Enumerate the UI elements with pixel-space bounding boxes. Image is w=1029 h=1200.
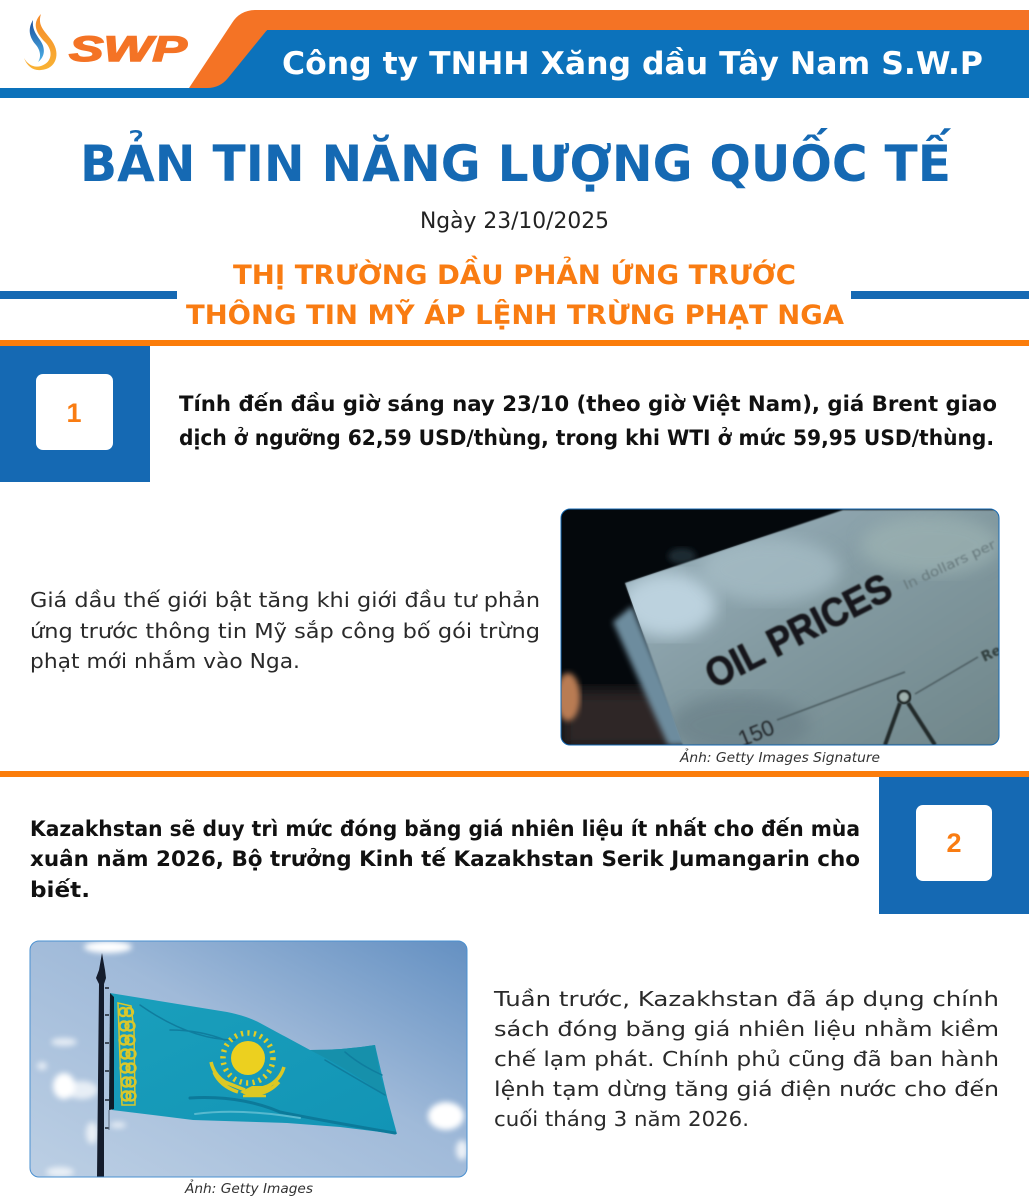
text: section 1 lead: Tính đến đầu giờ sáng nay 23/10 (theo giờ Việt Nam), giá Brent giao bbox=[179, 392, 997, 416]
text: section 2 lead bbox=[30, 817, 860, 902]
panel: section 1 number: 1 bbox=[66, 398, 82, 428]
text: section 2 body: chế lạm phát. Chính phủ cũng đã ban hành bbox=[494, 1047, 999, 1071]
text: section 2 body: Tuần trước, Kazakhstan đã áp dụng chính bbox=[493, 987, 999, 1011]
flag pole bbox=[96, 953, 109, 1177]
blue ribbon and bottom bar bbox=[0, 30, 1029, 98]
logo: SWP flame: SWP bbox=[69, 30, 188, 69]
text: section 1 body: ứng trước thông tin Mỹ sắp công bố gói trừng bbox=[30, 619, 540, 643]
text: section 2 lead: xuân năm 2026, Bộ trưởng Kinh tế Kazakhstan Serik Jumangarin cho bbox=[30, 847, 860, 871]
text: section 2 body: cuối tháng 3 năm 2026. bbox=[494, 1107, 749, 1131]
photo: Kazakhstan flag bbox=[30, 941, 468, 1177]
text: section 1 lead bbox=[179, 392, 997, 450]
header banner bbox=[0, 10, 1029, 98]
text: section 2 lead: Kazakhstan sẽ duy trì mức đóng băng giá nhiên liệu ít nhất cho đến mùa bbox=[30, 817, 860, 841]
flag ornament bbox=[118, 1003, 136, 1105]
flag sun and eagle bbox=[211, 1033, 284, 1096]
company name: Công ty TNHH Xăng dầu Tây Nam S.W.P bbox=[282, 46, 983, 82]
subtitle bbox=[0, 256, 1029, 331]
photo: oil prices: OIL PRICES bbox=[698, 566, 899, 697]
text: section 1 body: phạt mới nhắm vào Nga. bbox=[30, 649, 300, 673]
text: section 2 body: lệnh tạm dừng tăng giá điện nước cho đến bbox=[494, 1077, 999, 1101]
photo: oil prices: Re bbox=[979, 643, 1004, 666]
text: section 1 body bbox=[30, 588, 540, 673]
subtitle: THÔNG TIN MỸ ÁP LỆNH TRỪNG PHẠT NGA bbox=[186, 299, 844, 331]
flag cloth bbox=[109, 993, 397, 1134]
photo: oil prices bbox=[556, 509, 1004, 755]
panel: section 2 number bbox=[879, 777, 1029, 914]
subtitle: THỊ TRƯỜNG DẦU PHẢN ỨNG TRƯỚC bbox=[233, 256, 796, 291]
text: section 2 lead: biết. bbox=[30, 878, 90, 902]
text: section 2 body bbox=[493, 987, 999, 1131]
photo: oil prices: 150 bbox=[735, 715, 778, 752]
date: Ngày 23/10/2025 bbox=[420, 209, 609, 234]
panel: section 1 number bbox=[0, 346, 150, 482]
panel: section 2 number: 2 bbox=[946, 828, 962, 858]
logo: SWP flame bbox=[24, 14, 188, 70]
photo: oil prices: In dollars per bbox=[901, 537, 999, 594]
text: section 1 lead: dịch ở ngưỡng 62,59 USD/thùng, trong khi WTI ở mức 59,95 USD/thùng. bbox=[179, 426, 994, 450]
title: BẢN TIN NĂNG LƯỢNG QUỐC TẾ bbox=[80, 128, 952, 193]
caption: photo 1: Ảnh: Getty Images Signature bbox=[679, 749, 880, 766]
text: section 2 body: sách đóng băng giá nhiên liệu nhằm kiềm bbox=[494, 1017, 999, 1041]
text: section 1 body: Giá dầu thế giới bật tăng khi giới đầu tư phản bbox=[30, 588, 540, 612]
caption: photo 2: Ảnh: Getty Images bbox=[184, 1180, 313, 1197]
orange ribbon bbox=[189, 10, 1029, 88]
